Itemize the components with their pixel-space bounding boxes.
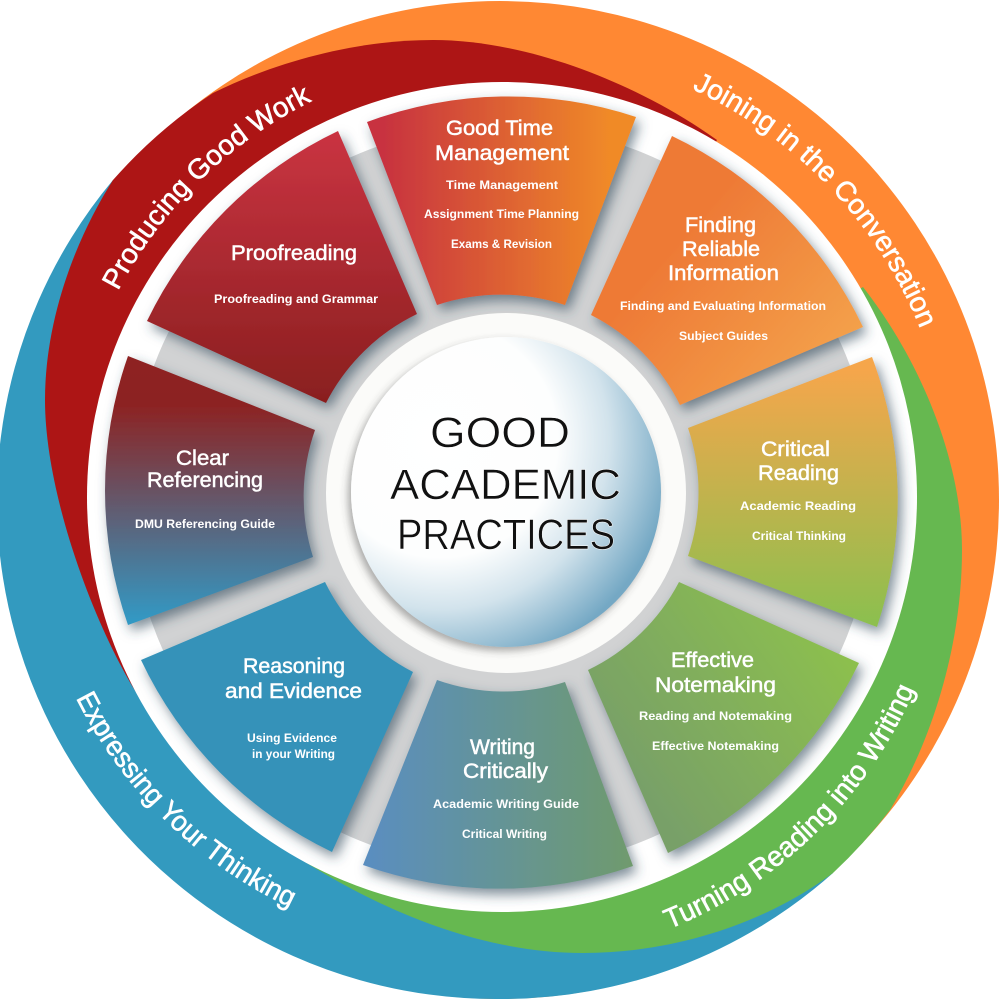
segment: Clear Referencing xyxy=(105,356,315,625)
segment: Good Time Management xyxy=(367,96,636,305)
text: Critical Reading: Academic Reading xyxy=(740,499,856,513)
text: Critical Reading xyxy=(740,438,856,543)
text: Clear Referencing: DMU Referencing Guide xyxy=(135,517,275,531)
text: Effective Notemaking xyxy=(639,649,792,753)
text: Effective Notemaking: Effective xyxy=(671,649,754,672)
text: Critical Reading: Critical Thinking xyxy=(752,529,846,543)
title: PRACTICES xyxy=(397,511,615,559)
text: Finding Reliable Information: Information xyxy=(668,262,779,285)
text: Proofreading: Proofreading and Grammar xyxy=(214,292,378,306)
title xyxy=(390,409,621,559)
text: Clear Referencing: Referencing xyxy=(147,469,263,492)
text: Effective Notemaking: Reading and Notemaking xyxy=(639,709,792,723)
text: Reasoning and Evidence: in your Writing xyxy=(252,747,335,761)
curved label: Turning Reading into Writing: Turning Reading into Writing xyxy=(662,684,918,927)
text: Reasoning and Evidence: Using Evidence xyxy=(247,731,337,745)
segment: Critical Reading xyxy=(688,357,898,627)
curved label: Joining in the Conversation: Joining in the Conversation xyxy=(694,74,932,328)
text: Writing Critically: Academic Writing Guide xyxy=(433,797,579,811)
text: Good Time Management: Time Management xyxy=(446,178,558,192)
text: Good Time Management: Good Time xyxy=(446,117,553,140)
gray wheel backing xyxy=(130,125,874,869)
hub ring xyxy=(326,313,686,673)
segment: Proofreading xyxy=(147,131,417,403)
text: Finding Reliable Information: Subject Guides xyxy=(679,329,768,343)
text: Good Time Management: Assignment Time Planning xyxy=(424,207,579,221)
curved label: Producing Good Work: Producing Good Work xyxy=(102,87,313,290)
white inner disc xyxy=(87,82,917,912)
text: Writing Critically: Writing xyxy=(470,736,535,759)
text: Writing Critically: Critical Writing xyxy=(462,827,547,841)
text: Reasoning and Evidence xyxy=(225,655,362,761)
text: Effective Notemaking: Effective Notemaking xyxy=(652,739,779,753)
hub sphere xyxy=(351,337,661,647)
segment: Effective Notemaking xyxy=(588,582,859,853)
segment: Reasoning and Evidence xyxy=(141,582,413,852)
text: Critical Reading: Reading xyxy=(758,462,839,485)
text: Writing Critically xyxy=(433,736,579,841)
segment: Writing Critically xyxy=(363,680,633,889)
segment: Finding Reliable Information xyxy=(591,136,863,405)
curved label: Expressing Your Thinking: Expressing Your Thinking xyxy=(76,690,296,910)
text: Clear Referencing xyxy=(135,447,275,531)
text: Reasoning and Evidence: Reasoning xyxy=(243,655,345,678)
text: Good Time Management: Management xyxy=(435,142,569,165)
text: Effective Notemaking: Notemaking xyxy=(655,674,776,697)
outer band: Turning Reading into Writing xyxy=(297,287,962,953)
text: Finding Reliable Information: Finding xyxy=(685,214,756,237)
title: GOOD xyxy=(430,409,570,457)
text: Finding Reliable Information: Reliable xyxy=(682,238,760,261)
text: Good Time Management: Exams & Revision xyxy=(451,237,552,251)
text: Critical Reading: Critical xyxy=(761,438,830,461)
title: ACADEMIC xyxy=(390,461,621,509)
outer band: Expressing Your Thinking xyxy=(0,180,833,999)
text: Finding Reliable Information: Finding and Evaluating Information xyxy=(620,299,826,313)
outer band: Producing Good Work xyxy=(45,40,717,703)
text: Proofreading: Proofreading xyxy=(231,242,357,265)
text: Good Time Management xyxy=(424,117,579,251)
text: Proofreading xyxy=(214,242,378,306)
text: Reasoning and Evidence: and Evidence xyxy=(225,680,362,703)
text: Clear Referencing: Clear xyxy=(176,447,229,470)
text: Writing Critically: Critically xyxy=(463,760,549,783)
text: Finding Reliable Information xyxy=(620,214,826,343)
